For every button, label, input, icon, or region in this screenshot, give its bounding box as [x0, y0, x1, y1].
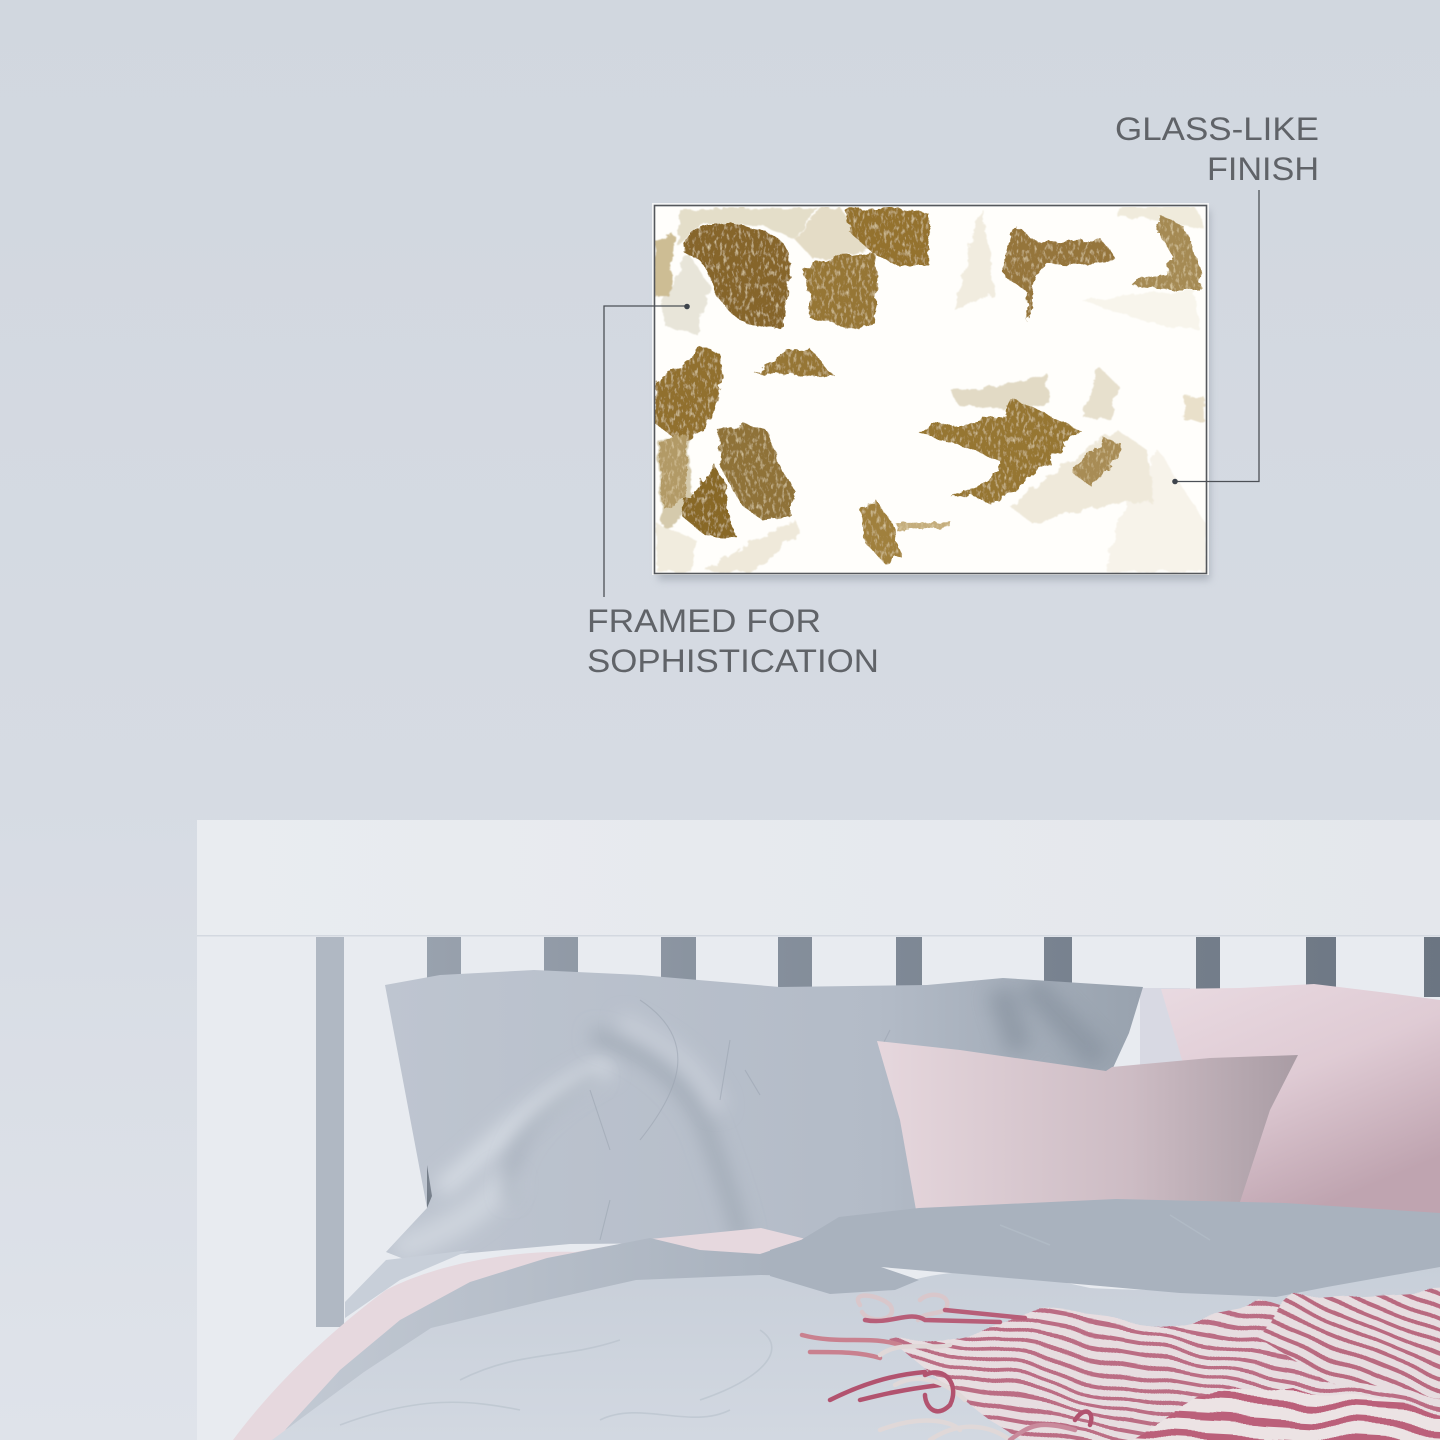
callout text: FRAMED FOR	[587, 603, 821, 639]
leader line	[1176, 190, 1259, 482]
striped throw blanket	[802, 1290, 1440, 1440]
pillow corner shadow	[427, 1165, 432, 1208]
frame shadow	[658, 210, 1210, 580]
leader dot	[684, 304, 690, 309]
callout text	[587, 603, 879, 679]
callout: glass-like finish	[1115, 111, 1319, 484]
framed artwork	[652, 203, 1210, 580]
back pink pillow	[1161, 984, 1440, 1215]
thin frame edge	[654, 206, 1206, 574]
callout text	[1115, 111, 1319, 187]
callout text: GLASS-LIKE	[1115, 111, 1319, 147]
small pink cushion	[877, 1041, 1298, 1215]
white frame	[652, 203, 1209, 575]
duvet fold band	[770, 1199, 1440, 1297]
slot openings	[427, 937, 1440, 997]
throw fringe	[802, 1295, 1091, 1440]
duvet fold left side	[285, 1238, 801, 1430]
large grey pillow	[385, 970, 1143, 1259]
left opening	[316, 937, 344, 1327]
canvas painting	[655, 207, 1206, 573]
bed	[233, 970, 1440, 1440]
main duvet	[272, 1265, 1440, 1440]
leader dot	[1172, 479, 1178, 484]
headboard	[197, 820, 1440, 1440]
pink bed sheet	[233, 1228, 810, 1440]
callout text: FINISH	[1207, 151, 1319, 187]
slat panel	[197, 936, 1440, 1440]
pillow folds	[440, 1065, 610, 1190]
callout: framed for sophistication	[587, 304, 879, 679]
callout text: SOPHISTICATION	[587, 643, 879, 679]
gold brush strokes	[684, 224, 789, 328]
duvet wrinkles	[340, 1215, 1210, 1425]
light undersheet	[345, 1250, 470, 1318]
leader line	[604, 306, 688, 597]
top rail	[197, 820, 1440, 935]
wall gap between pillows	[1140, 988, 1190, 1113]
